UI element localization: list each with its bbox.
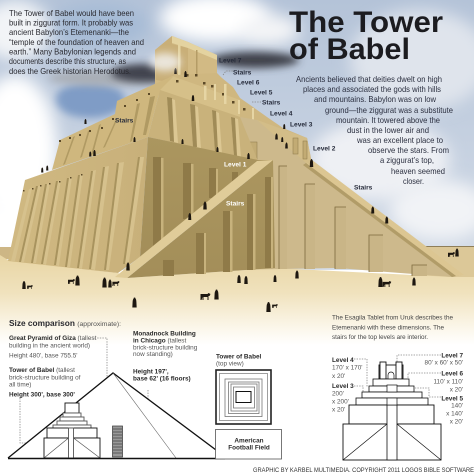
title: of Babel <box>289 33 410 66</box>
right description text: closer. <box>403 176 424 186</box>
intro text block: built in ziggurat form. It probably was <box>9 18 133 28</box>
level 1 dark front face <box>140 137 273 257</box>
upper stepped tiers <box>117 73 312 165</box>
Etemenanki dimension diagram: Level 5 <box>441 396 463 402</box>
intro text block: documents describe this structure, as <box>9 56 126 66</box>
right description text: Ancients believed that deities dwelt on high <box>296 74 442 84</box>
size comparison text notes: Height 480', base 755.5' <box>9 352 78 360</box>
right description text: a ziggurat’s top, <box>380 155 434 165</box>
people and animals <box>22 68 459 312</box>
size comparison text notes: brick-structure building <box>133 344 198 352</box>
pyramid <box>8 373 224 458</box>
right description text: was an excellent place to <box>356 135 443 145</box>
tower level labels: Level 4 <box>270 110 293 118</box>
tower level labels: Level 3 <box>290 122 313 128</box>
tower side elevation small <box>44 403 100 458</box>
tower level labels: Stairs <box>226 200 245 208</box>
size comparison text notes: brick-structure building of <box>9 374 81 382</box>
size comparison text notes: Height 300', base 300' <box>9 392 75 398</box>
intro text block: does the Greek historian Herodotus. <box>9 66 131 76</box>
illustration: ziggurat tower <box>8 36 464 312</box>
sky background with clouds <box>0 0 474 270</box>
size comparison text notes: Tower of Babel (tallest <box>9 367 75 374</box>
Etemenanki dimension diagram <box>332 352 463 460</box>
size comparison text notes: Height 197', <box>133 368 169 376</box>
ground and horizon walls <box>0 246 474 345</box>
right description text: ground—the ziggurat was a substitute <box>325 105 453 115</box>
tower level labels: Stairs <box>262 100 281 106</box>
right description text: dust in the lower air and <box>347 125 429 135</box>
top view label <box>216 354 262 368</box>
Monadnock building <box>112 426 122 457</box>
Etemenanki dimension diagram: x 140' <box>446 410 463 418</box>
size comparison text notes: base 62' (16 floors) <box>133 376 191 382</box>
intro text block: earth.” Many Babylonian legends and <box>9 46 136 56</box>
tower level labels: Stairs <box>115 118 134 124</box>
size comparison text notes: in Chicago (tallest <box>133 338 186 344</box>
right sloped face <box>230 117 464 277</box>
tower level labels: Level 2 <box>313 146 336 152</box>
cloud wisp over tower <box>149 53 181 71</box>
Etemenanki dimension diagram: x 200' <box>332 398 349 406</box>
top view label: Tower of Babel <box>216 354 262 360</box>
top view label: (top view) <box>216 360 244 368</box>
size comparison text notes: Monadnock Building <box>133 330 196 338</box>
Etemenanki dimension diagram: Level 3 <box>332 383 354 390</box>
tower level labels: Stairs <box>233 70 252 76</box>
Etemenanki dimension diagram: Level 6 <box>441 370 463 378</box>
level 1 left face <box>8 137 148 273</box>
level 1 stair lower face <box>127 160 275 278</box>
comparison diagram: pyramid, tower, Monadnock <box>8 338 225 458</box>
size comparison text notes <box>9 330 198 398</box>
American football field <box>216 430 282 459</box>
Etemenanki dimension diagram: x 20' <box>332 373 345 380</box>
Etemenanki dimension diagram: Level 7 <box>441 352 463 360</box>
Etemenanki dimension diagram: x 20' <box>332 406 345 414</box>
right description text: observe the stars. From <box>368 145 449 155</box>
size comparison text notes: now standing) <box>133 351 173 358</box>
Etemenanki dimension diagram: 80' x 60' x 50' <box>425 360 463 366</box>
level 2 front face <box>148 90 258 161</box>
tower level labels <box>115 58 373 208</box>
tower level labels: Level 7 <box>219 58 242 64</box>
size comparison text notes: all time) <box>9 382 31 388</box>
tower level labels: Level 5 <box>250 90 273 96</box>
level 2 left face <box>52 75 175 170</box>
right description text: places and associated the gods with hills <box>303 84 441 94</box>
title: The Tower <box>289 6 443 39</box>
Etemenanki dimension diagram: 170' x 170' <box>332 364 363 372</box>
right description text: and mountains. Babylon was on low <box>314 94 437 104</box>
tower level labels: Level 6 <box>237 80 260 86</box>
size comparison text notes: building in the ancient world) <box>9 342 90 350</box>
Etemenanki dimension diagram: 140' <box>451 402 463 410</box>
top view diagram <box>216 370 271 424</box>
right description text: heaven seemed <box>391 166 445 176</box>
right description text: mountain. It towered above the <box>336 115 440 125</box>
tower top block <box>155 36 217 85</box>
size comparison text notes: Great Pyramid of Giza (tallest <box>9 335 97 342</box>
size comparison heading: Size comparison (approximate): <box>9 318 121 328</box>
intro text block: “temple of the foundation of heaven and <box>9 37 144 47</box>
Etemenanki dimension diagram: x 20' <box>450 386 463 394</box>
Etemenanki dimension diagram: 110' x 110' <box>433 378 463 386</box>
Etemenanki dimension diagram: x 20' <box>450 418 463 426</box>
Etemenanki dimension diagram: Level 4 <box>332 357 354 364</box>
Esagila tablet text: The Esagila Tablet from Uruk describes the <box>332 314 453 322</box>
American football field: Football Field <box>228 444 270 452</box>
tower level labels: Stairs <box>354 184 373 192</box>
Esagila tablet text: Etemenanki with these dimensions. The <box>332 324 444 332</box>
Esagila tablet text: stairs for the top levels are interior. <box>332 334 428 341</box>
main stairs <box>115 160 273 278</box>
tower level labels: Level 1 <box>224 162 247 168</box>
American football field: American <box>234 438 264 444</box>
intro text block: ancient Babylon’s Etemenanki—the <box>9 27 129 37</box>
intro text block: The Tower of Babel would have been <box>9 8 134 18</box>
Etemenanki dimension diagram: 200' <box>332 390 344 398</box>
